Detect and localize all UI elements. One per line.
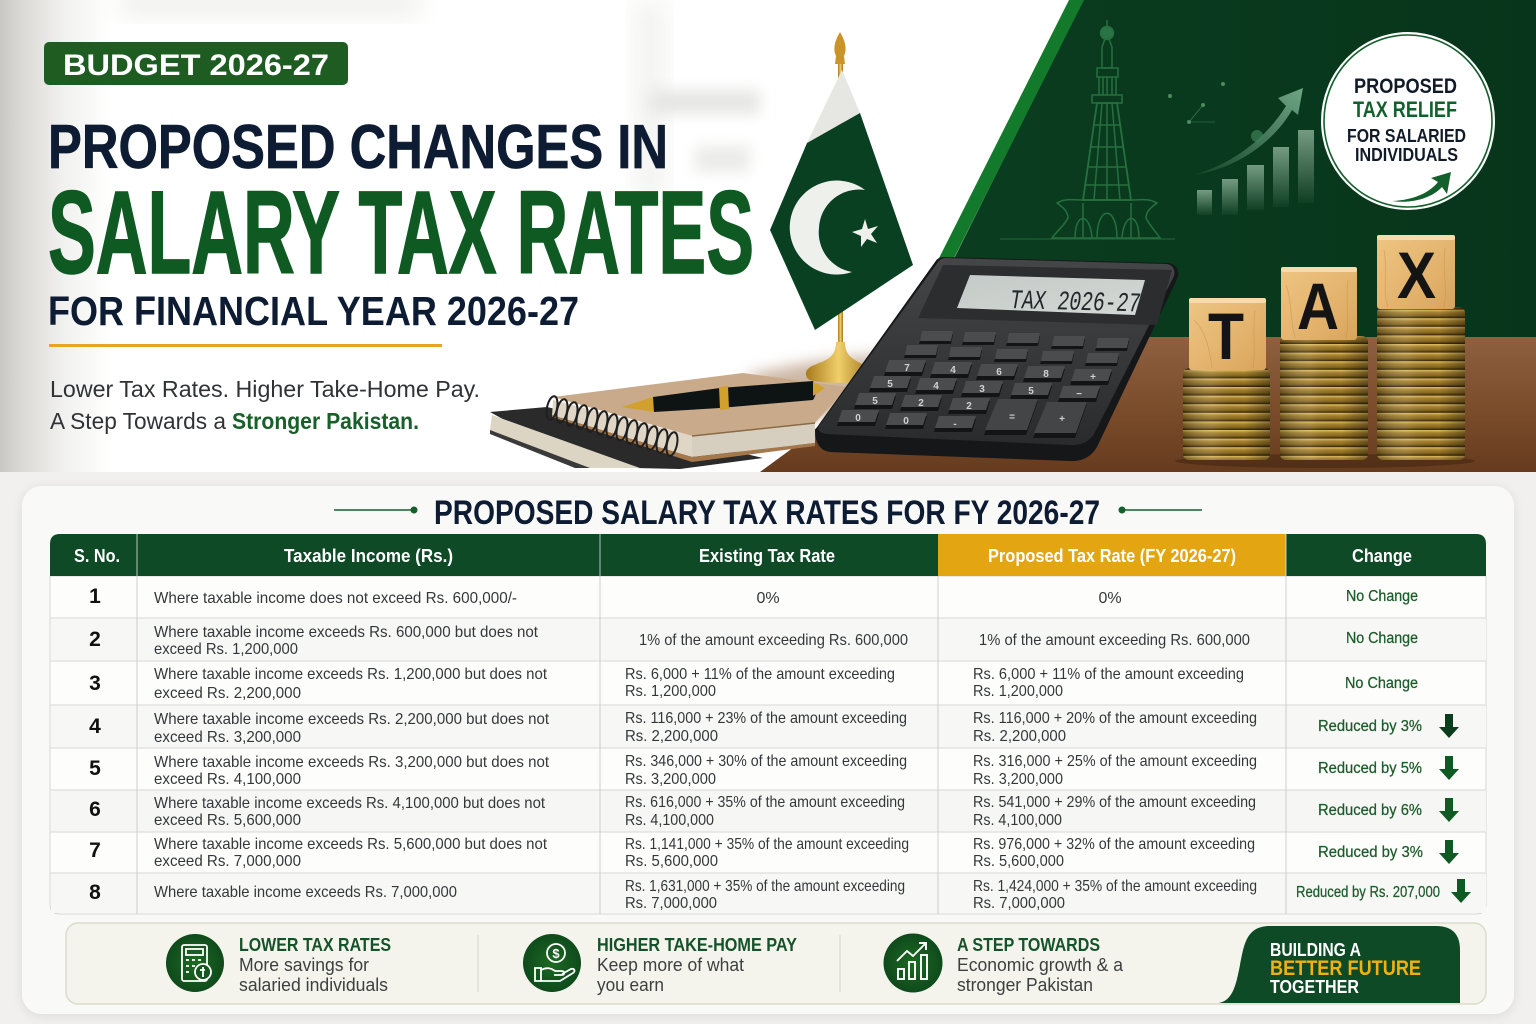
row 6 xyxy=(89,794,1459,829)
title: salary tax rates: SALARY TAX RATES xyxy=(48,167,754,299)
circular badge: proposed tax relief: FOR SALARIED xyxy=(1347,125,1466,146)
table header: Existing Tax Rate xyxy=(699,546,835,566)
calculator xyxy=(815,257,1178,461)
row 3: Rs. 6,000 + 11% of the amount exceeding xyxy=(625,666,895,683)
circular badge: proposed tax relief xyxy=(1321,32,1495,210)
benefit: higher take-home pay: you earn xyxy=(597,974,664,995)
circular badge: proposed tax relief: PROPOSED xyxy=(1354,75,1457,98)
calculator keys: + xyxy=(1059,414,1065,425)
row 2: 1% of the amount exceeding Rs. 600,000 xyxy=(979,632,1250,649)
row 5: 5 xyxy=(89,757,101,780)
row 1: Where taxable income does not exceed Rs. 600,000/- xyxy=(154,590,517,607)
row 3: No Change xyxy=(1345,675,1418,692)
row 7: Rs. 1,141,000 + 35% of the amount exceeding xyxy=(625,836,909,853)
row 3: exceed Rs. 2,200,000 xyxy=(154,685,301,702)
benefit: a step towards: stronger Pakistan xyxy=(957,974,1093,995)
row 8: Where taxable income exceeds Rs. 7,000,000 xyxy=(154,884,457,901)
coin stacks xyxy=(1175,307,1475,468)
row 6: Reduced by 6% xyxy=(1318,802,1422,819)
calculator keys: - xyxy=(953,419,957,430)
row 7: Rs. 5,600,000 xyxy=(625,853,718,870)
calculator keys: 5 xyxy=(872,396,878,407)
gold rule xyxy=(49,344,442,347)
row 5: Reduced by 5% xyxy=(1318,760,1422,777)
row 6: Rs. 616,000 + 35% of the amount exceeding xyxy=(625,794,905,811)
row 5: Rs. 316,000 + 25% of the amount exceeding xyxy=(973,753,1257,770)
wooden block: A xyxy=(1281,267,1357,343)
calculator keys: 3 xyxy=(979,384,985,395)
row 2: 2 xyxy=(89,628,101,651)
tagline: A Step Towards a xyxy=(50,408,226,434)
row 6: Rs. 4,100,000 xyxy=(973,812,1062,829)
green diagonal panel xyxy=(911,0,1536,345)
table header: Change xyxy=(1352,546,1412,566)
table grid xyxy=(50,576,1486,914)
row 4: Reduced by 3% xyxy=(1318,718,1422,735)
row 5: exceed Rs. 4,100,000 xyxy=(154,771,301,788)
row 7: Rs. 976,000 + 32% of the amount exceeding xyxy=(973,836,1255,853)
row 3: Rs. 1,200,000 xyxy=(973,683,1063,700)
row 1: 1 xyxy=(89,585,101,608)
row 7: 7 xyxy=(89,839,101,862)
row 2: 1% of the amount exceeding Rs. 600,000 xyxy=(639,632,908,649)
lower background xyxy=(0,472,1536,1024)
calculator keys: 4 xyxy=(933,381,939,392)
calculator keys: = xyxy=(1009,412,1015,423)
circular badge: proposed tax relief: INDIVIDUALS xyxy=(1355,144,1458,165)
minar-e-pakistan watermark xyxy=(1000,20,1175,239)
row 4: 4 xyxy=(89,715,101,738)
calculator display text: TAX 2026-27 xyxy=(1010,287,1141,320)
hero background xyxy=(0,0,1536,472)
calculator keys: 2 xyxy=(966,401,972,412)
callout: building a better future together: BUILDING A xyxy=(1270,940,1361,960)
callout: building a better future together: BETTER FUTURE xyxy=(1270,957,1421,980)
benefit: lower tax rates: More savings for xyxy=(239,954,369,975)
benefit: lower tax rates: salaried individuals xyxy=(239,974,388,995)
wooden block: T xyxy=(1189,298,1266,373)
row 4: Rs. 116,000 + 20% of the amount exceeding xyxy=(973,710,1257,727)
icon: hand holding coin xyxy=(523,934,581,992)
row 1: 0% xyxy=(1098,590,1122,607)
row 4: exceed Rs. 3,200,000 xyxy=(154,729,301,746)
row 8: Rs. 1,631,000 + 35% of the amount exceeding xyxy=(625,878,905,895)
calculator keys: 2 xyxy=(918,398,924,409)
row 3: 3 xyxy=(89,672,101,695)
calculator keys xyxy=(837,331,1129,438)
badge: budget 2026-27 xyxy=(44,42,348,85)
row 3: Where taxable income exceeds Rs. 1,200,000 but does not xyxy=(154,666,548,683)
row 6: Where taxable income exceeds Rs. 4,100,000 but does not xyxy=(154,795,546,812)
row 6: exceed Rs. 5,600,000 xyxy=(154,812,301,829)
row 8 xyxy=(89,878,1471,912)
callout: building a better future together xyxy=(1219,926,1460,1003)
row 7: exceed Rs. 7,000,000 xyxy=(154,853,301,870)
wooden block: X: X xyxy=(1397,238,1436,312)
flag of pakistan on stand xyxy=(770,32,913,383)
row 4: Where taxable income exceeds Rs. 2,200,000 but does not xyxy=(154,711,550,728)
tagline: Stronger Pakistan. xyxy=(232,408,419,434)
benefit: a step towards: A STEP TOWARDS xyxy=(957,934,1100,955)
calculator keys: 7 xyxy=(904,363,910,374)
benefit: a step towards: Economic growth & a xyxy=(957,954,1124,975)
table header: Proposed Tax Rate (FY 2026-27) xyxy=(988,546,1236,566)
row 8: Rs. 1,424,000 + 35% of the amount exceeding xyxy=(973,878,1257,895)
calculator keys: + xyxy=(1090,372,1096,383)
row 8: 8 xyxy=(89,881,101,904)
row 5: Where taxable income exceeds Rs. 3,200,000 but does not xyxy=(154,754,550,771)
table header: Taxable Income (Rs.) xyxy=(284,546,453,566)
row 8: Reduced by Rs. 207,000 xyxy=(1296,884,1440,901)
calculator keys: 6 xyxy=(996,367,1002,378)
benefit: lower tax rates xyxy=(239,934,391,995)
row 8: Rs. 7,000,000 xyxy=(973,895,1065,912)
row 6: Rs. 4,100,000 xyxy=(625,812,714,829)
row 2: exceed Rs. 1,200,000 xyxy=(154,641,298,658)
row 8: Rs. 7,000,000 xyxy=(625,895,717,912)
row 3 xyxy=(89,666,1418,702)
row 5: Rs. 346,000 + 30% of the amount exceeding xyxy=(625,753,907,770)
row 2: No Change xyxy=(1346,630,1418,647)
benefit: higher take-home pay: HIGHER TAKE-HOME PAY xyxy=(597,934,798,955)
tagline: Lower Tax Rates. Higher Take-Home Pay. xyxy=(50,376,480,402)
row 7: Where taxable income exceeds Rs. 5,600,000 but does not xyxy=(154,836,548,853)
benefits strip xyxy=(66,923,1486,1004)
calculator keys: 4 xyxy=(950,365,956,376)
row 7 xyxy=(89,836,1459,870)
row 5: Rs. 3,200,000 xyxy=(625,771,716,788)
wooden block: A: A xyxy=(1297,269,1339,343)
calculator keys: 0 xyxy=(855,413,861,424)
table header: S. No. xyxy=(74,546,120,566)
benefit: lower tax rates: LOWER TAX RATES xyxy=(239,934,391,955)
row 5 xyxy=(89,753,1459,788)
calculator keys: − xyxy=(1076,389,1082,400)
calculator keys: 8 xyxy=(1043,369,1049,380)
wooden block: T: T xyxy=(1208,299,1244,373)
calculator keys: 5 xyxy=(887,379,893,390)
wooden block: X xyxy=(1377,235,1455,312)
row 4: Rs. 2,200,000 xyxy=(625,728,718,745)
benefit: a step towards xyxy=(957,934,1124,995)
benefit: higher take-home pay xyxy=(597,934,798,995)
row 6: Rs. 541,000 + 29% of the amount exceeding xyxy=(973,794,1256,811)
benefit: higher take-home pay: Keep more of what xyxy=(597,954,744,975)
wooden table xyxy=(745,337,1536,472)
row 7: Rs. 5,600,000 xyxy=(973,853,1064,870)
calculator keys: 0 xyxy=(903,416,909,427)
row 1: 0% xyxy=(756,590,780,607)
row 3: Rs. 1,200,000 xyxy=(625,683,716,700)
row 4: Rs. 2,200,000 xyxy=(973,728,1066,745)
icon: growth chart xyxy=(884,934,942,992)
row 1: No Change xyxy=(1346,588,1418,605)
callout: building a better future together: TOGETHER xyxy=(1270,977,1359,997)
badge: budget 2026-27: BUDGET 2026-27 xyxy=(63,49,329,82)
table heading: PROPOSED SALARY TAX RATES FOR FY 2026-27 xyxy=(434,494,1100,532)
table header xyxy=(50,534,1486,576)
row 7: Reduced by 3% xyxy=(1318,844,1423,861)
icon: calculator savings xyxy=(166,934,224,992)
row 5: Rs. 3,200,000 xyxy=(973,771,1063,788)
row 3: Rs. 6,000 + 11% of the amount exceeding xyxy=(973,666,1244,683)
icon: hand holding coin: $ xyxy=(552,946,560,961)
row 1 xyxy=(89,585,1418,608)
title: for financial year: FOR FINANCIAL YEAR 2026-27 xyxy=(48,288,579,334)
circular badge: proposed tax relief: TAX RELIEF xyxy=(1353,97,1457,122)
row 2 xyxy=(89,624,1418,658)
notebook and pen xyxy=(490,373,847,469)
row 2: Where taxable income exceeds Rs. 600,000 but does not xyxy=(154,624,539,641)
tagline xyxy=(50,376,480,434)
row 4: Rs. 116,000 + 23% of the amount exceeding xyxy=(625,710,907,727)
title: proposed changes in: PROPOSED CHANGES IN xyxy=(48,113,668,182)
row 6: 6 xyxy=(89,798,101,821)
growth chart watermark xyxy=(1168,82,1314,215)
row 4 xyxy=(89,710,1459,746)
panel: table card xyxy=(22,486,1514,1014)
calculator keys: 5 xyxy=(1028,386,1034,397)
